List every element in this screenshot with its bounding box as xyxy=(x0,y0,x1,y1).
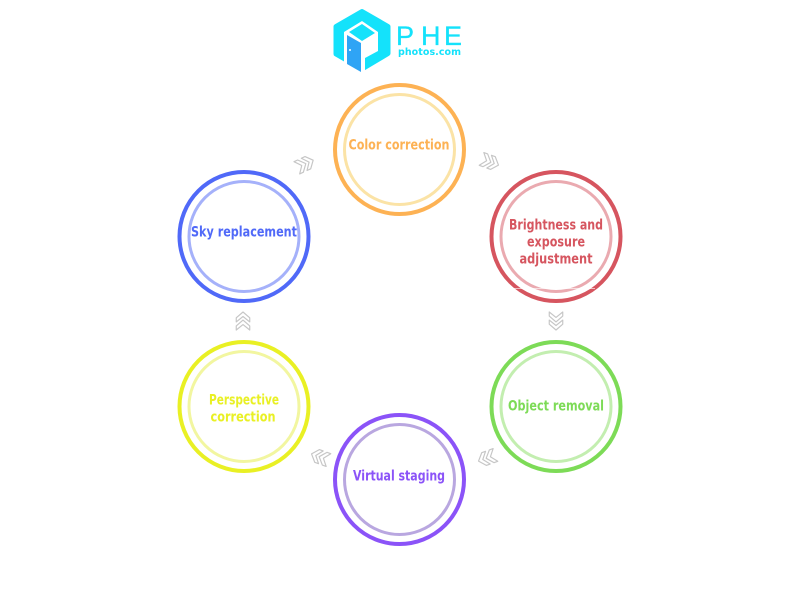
step: Brightness and exposure adjustment: Brightness and xyxy=(509,218,603,234)
logo subtext: photos.com xyxy=(398,47,461,58)
step: Brightness and exposure adjustment: adjustment xyxy=(520,252,593,268)
step: Color correction: Color correction xyxy=(348,138,450,154)
step: Perspective correction: Perspective xyxy=(209,392,279,408)
step: Color correction xyxy=(335,85,464,214)
step: Object removal: Object removal xyxy=(508,398,604,414)
arrow: color to brightness xyxy=(479,153,501,171)
step: Sky replacement xyxy=(180,172,308,301)
logo: PHE photos.com xyxy=(336,12,462,72)
step: Brightness and exposure adjustment: exposure xyxy=(527,234,585,250)
step: Perspective correction xyxy=(180,342,308,471)
arrow: sky to color xyxy=(294,154,316,174)
arrow: brightness to object removal xyxy=(549,312,563,330)
step: Virtual staging xyxy=(335,415,464,544)
arrow: perspective to sky xyxy=(236,312,250,330)
logo wordmark: H xyxy=(421,21,440,51)
step: Object removal xyxy=(492,342,620,471)
logo wordmark: E xyxy=(444,21,462,51)
icon: hexagon house door xyxy=(336,12,388,72)
step: Virtual staging: Virtual staging xyxy=(353,468,445,484)
arrow: object removal to staging xyxy=(476,449,498,467)
step: Sky replacement: Sky replacement xyxy=(191,224,297,240)
logo wordmark xyxy=(396,21,462,51)
logo wordmark: P xyxy=(396,21,414,51)
arrow: staging to perspective xyxy=(309,448,331,466)
step: Perspective correction: correction xyxy=(210,410,276,426)
step: Brightness and exposure adjustment xyxy=(492,172,620,301)
